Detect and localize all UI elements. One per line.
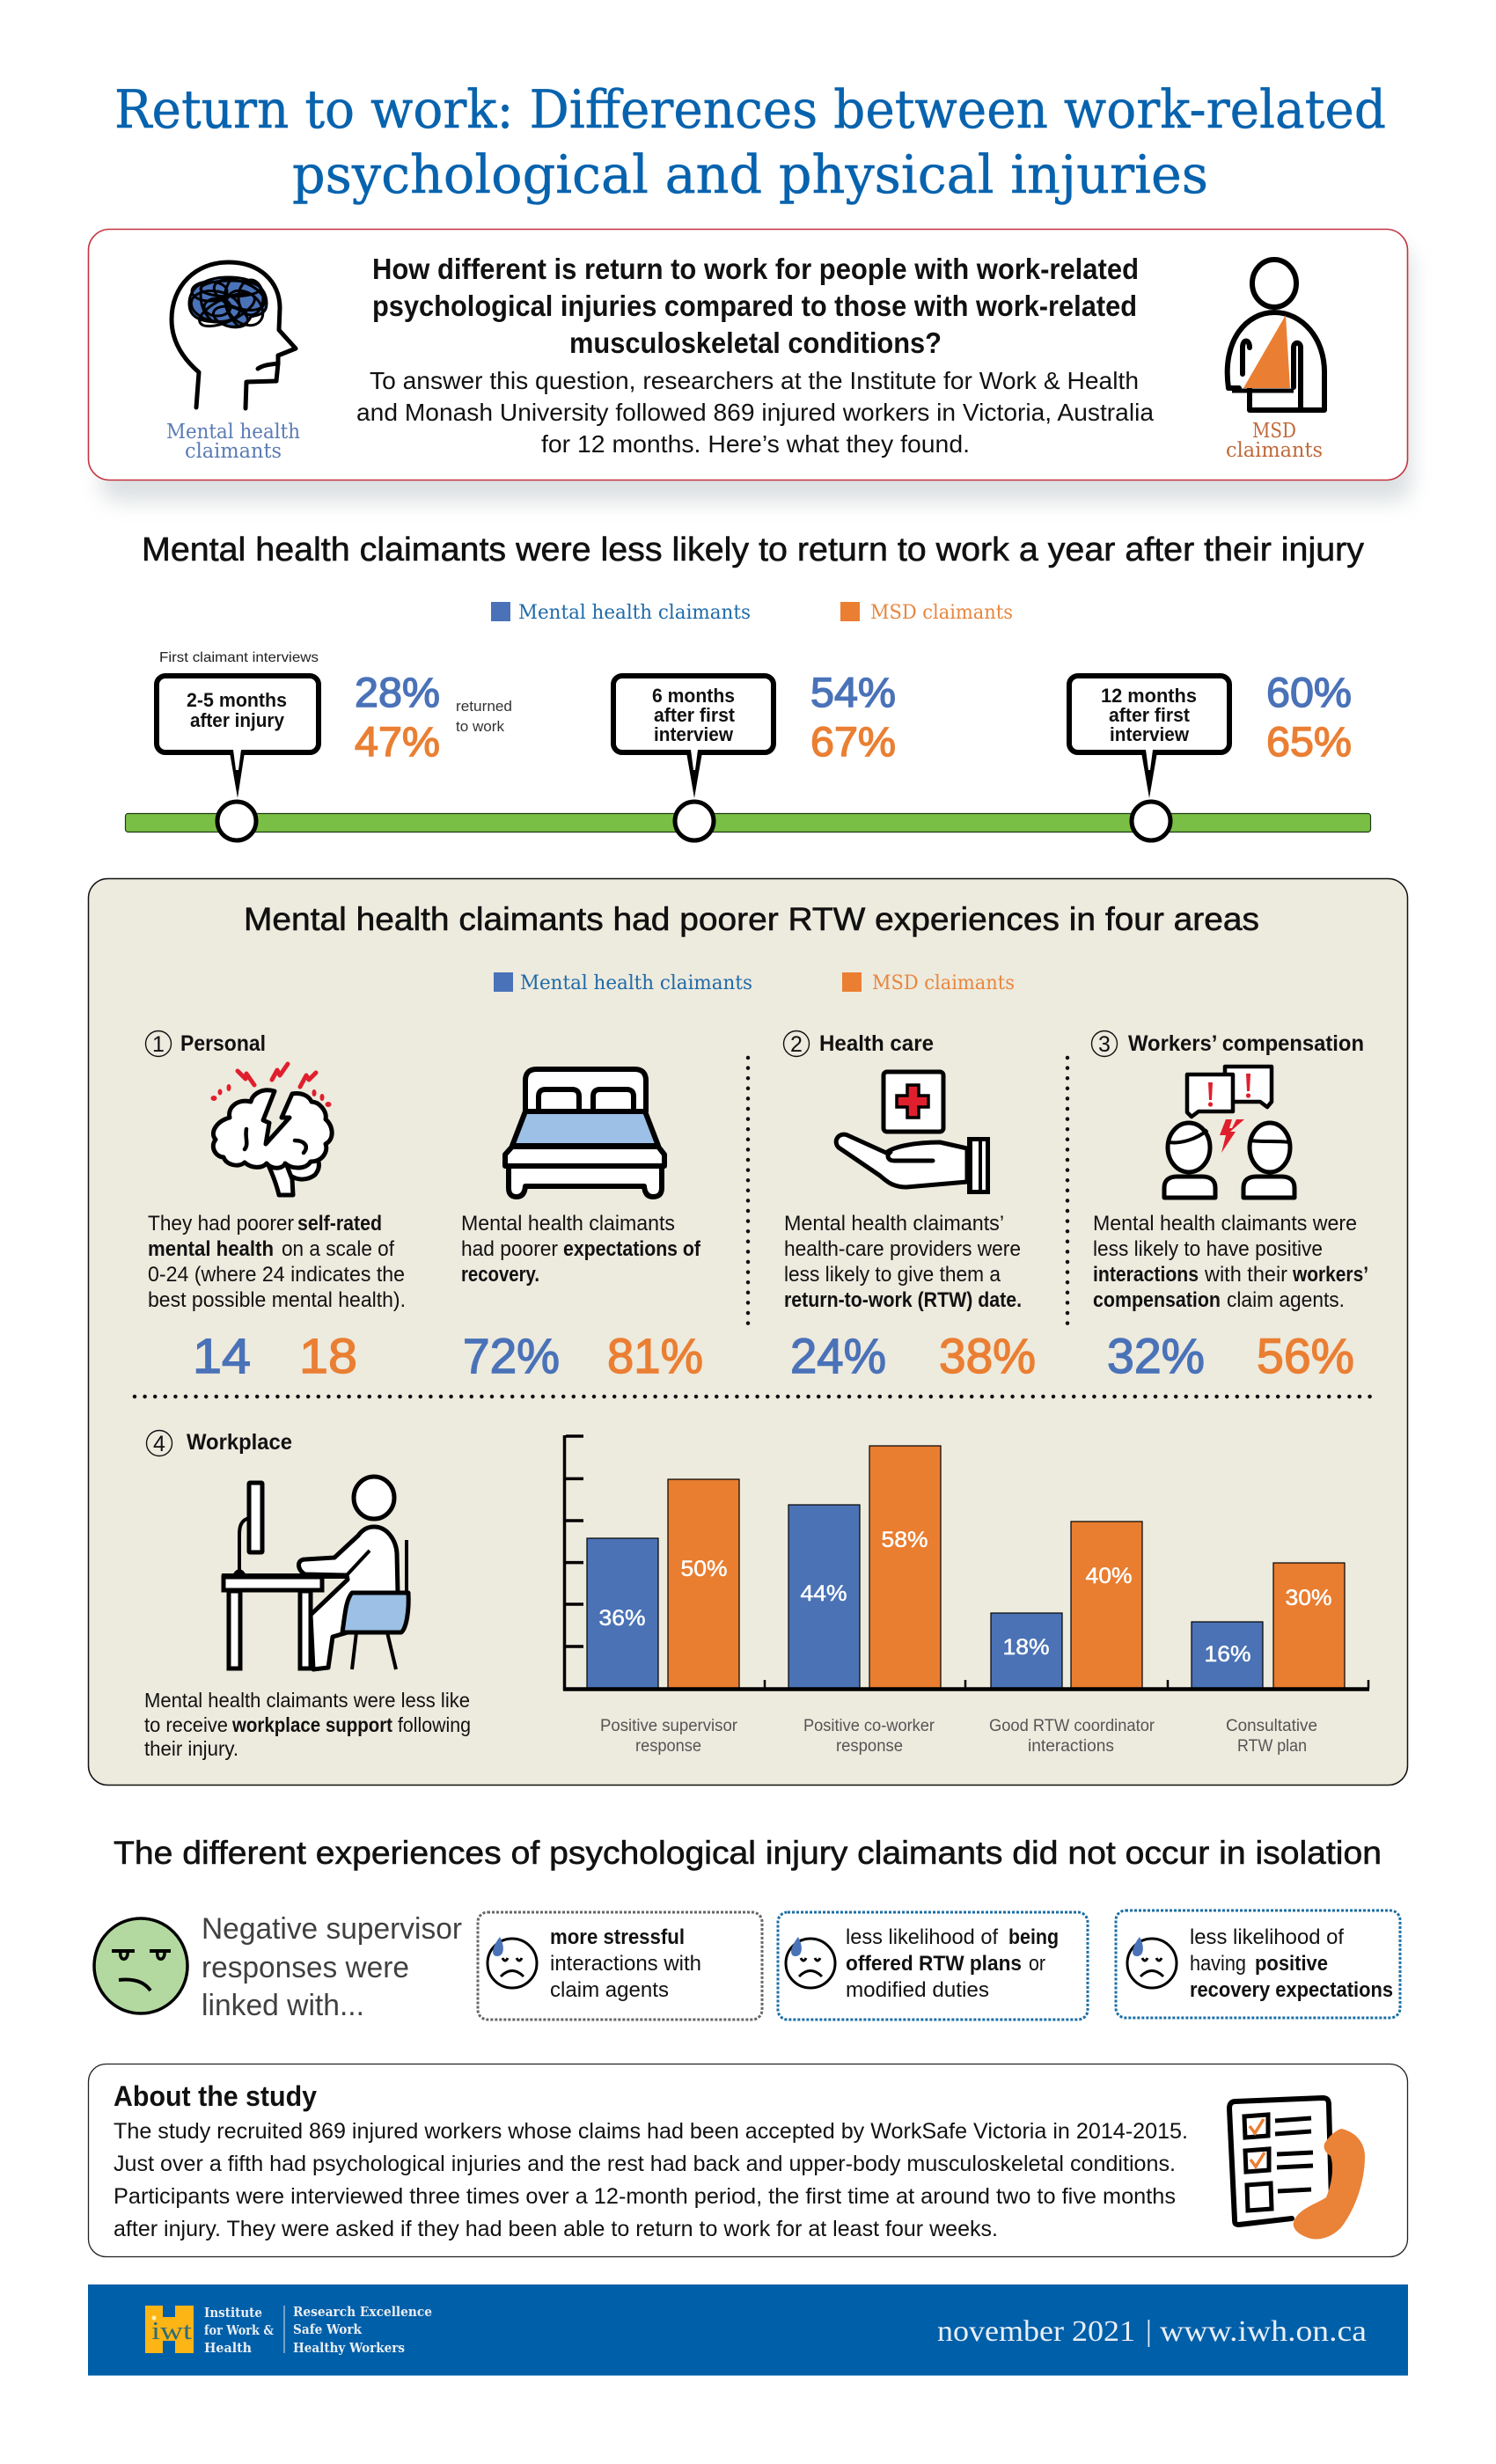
icon: cracked brain	[211, 1064, 332, 1195]
legend: four areas: Mental health claimants	[520, 972, 752, 994]
label: MSD claimants: claimants	[1226, 439, 1323, 462]
stage 3: 12 months: after first	[1109, 704, 1191, 726]
logo: IWH	[145, 2306, 194, 2353]
text: positive interactions: compensation	[1093, 1288, 1221, 1312]
stage 1: 2-5 months: 2-5 months	[187, 689, 287, 711]
legend: timeline: MSD claimants	[870, 602, 1013, 624]
study description: Participants were interviewed three times over a 12-month period, the first time at around two to five months	[114, 2184, 1176, 2209]
values: return-to-work date: 24%	[790, 1328, 886, 1383]
text: expectations of recovery: had poorer	[461, 1237, 558, 1261]
intro text: for 12 months. Here’s what they found.	[541, 430, 970, 458]
legend: timeline	[491, 602, 1013, 624]
values: return-to-work date: 38%	[939, 1328, 1036, 1383]
date and website: |	[1146, 2315, 1152, 2348]
text: return-to-work date: Mental health claimants’	[784, 1212, 1004, 1236]
text: expectations of recovery: expectations of	[563, 1237, 701, 1261]
label: mental health claimants: claimants	[185, 440, 282, 463]
timeline	[125, 650, 1371, 840]
heading: poorer RTW experiences: Mental health claimants had poorer RTW experiences in four areas	[244, 901, 1259, 937]
heading: did not occur in isolation: The different experiences of psychological injury claimants did not occur in isolation	[114, 1835, 1382, 1871]
chart category labels: interactions	[1028, 1737, 1114, 1756]
icon: bed	[505, 1069, 664, 1197]
section 4: workplace heading	[146, 1430, 292, 1456]
organization tagline: Safe Work	[293, 2321, 363, 2337]
text: negative supervisor responses: responses were	[202, 1951, 409, 1984]
chart category labels: response	[836, 1737, 903, 1756]
values: positive interactions: 32%	[1107, 1328, 1205, 1383]
stage 2: 6 months: 54%	[810, 669, 896, 715]
values: expectations of recovery: 72%	[463, 1328, 560, 1383]
text: positive interactions: interactions	[1093, 1263, 1199, 1287]
callout: stressful interactions	[478, 1912, 762, 2020]
study description: after injury. They were asked if they had been able to return to work for at least four weeks.	[114, 2217, 998, 2241]
values: positive interactions: 56%	[1257, 1328, 1354, 1383]
callout: stressful interactions: more stressful	[550, 1925, 685, 1949]
question text: How different is return to work for people with work-related	[372, 253, 1139, 285]
text: positive interactions: claim agents.	[1227, 1288, 1345, 1312]
intro text: To answer this question, researchers at the Institute for Work & Health	[370, 367, 1139, 394]
stage 2: 6 months: 6 months	[652, 685, 735, 707]
values: self-rated mental health: 14	[193, 1328, 251, 1383]
callout: RTW plans	[778, 1912, 1088, 2020]
text: workplace support: to receive	[144, 1713, 228, 1736]
text: self-rated mental health: best possible mental health).	[148, 1288, 406, 1312]
callout: RTW plans: less likelihood of	[846, 1925, 998, 1949]
footer	[88, 2284, 1408, 2376]
callout: recovery expectations: having	[1190, 1952, 1246, 1976]
title	[114, 79, 1386, 206]
organization name: Health	[204, 2340, 252, 2356]
panel: four areas	[88, 878, 1408, 1785]
text: workplace support: Mental health claimants were less like	[144, 1689, 470, 1712]
question text	[372, 253, 1139, 359]
chart category labels: response	[635, 1737, 701, 1756]
text: self-rated mental health: They had poorer	[148, 1212, 294, 1236]
text: workplace support: their injury.	[144, 1737, 238, 1760]
callout: recovery expectations	[1116, 1910, 1400, 2018]
text: expectations of recovery: recovery.	[461, 1263, 539, 1287]
bar value labels: 36%	[598, 1606, 646, 1631]
study description: Just over a fifth had psychological injuries and the rest had back and upper-body musculoskeletal conditions.	[114, 2152, 1176, 2176]
bar value labels: 18%	[1003, 1635, 1049, 1660]
icon: hand holding medical card	[836, 1072, 990, 1194]
stage 2: 6 months: after first	[654, 704, 736, 726]
text: negative supervisor responses	[202, 1912, 462, 2022]
text: negative supervisor responses: Negative supervisor	[202, 1912, 462, 1946]
legend: timeline: Mental health claimants	[518, 602, 751, 624]
stage 2: 6 months: interview	[654, 723, 734, 745]
text: positive interactions: with their	[1204, 1263, 1287, 1287]
callout: RTW plans: being	[1008, 1925, 1059, 1949]
stage 3: 12 months: 65%	[1266, 718, 1352, 765]
organization name: for Work &	[204, 2322, 274, 2338]
study description	[114, 2119, 1188, 2241]
text: return-to-work date: less likely to give them a	[784, 1263, 1001, 1287]
stage 1: 2-5 months: to work	[456, 718, 504, 735]
values: self-rated mental health: 18	[299, 1328, 357, 1383]
text: positive interactions: workers’	[1292, 1263, 1368, 1287]
text: return-to-work date	[784, 1212, 1022, 1312]
bars: positive supervisor response	[587, 1479, 739, 1689]
question text: psychological injuries compared to those with work-related	[372, 290, 1137, 322]
values: expectations of recovery: 81%	[607, 1328, 703, 1383]
chart category labels: RTW plan	[1237, 1737, 1307, 1756]
bars: good RTW coordinator interactions	[991, 1522, 1142, 1689]
text: positive interactions: less likely to have positive	[1093, 1237, 1323, 1261]
stage 1: 2-5 months: 28%	[355, 669, 440, 715]
callout: RTW plans: or	[1029, 1952, 1045, 1976]
icon: head with tangled brain	[172, 262, 296, 408]
section 3: workers' compensation heading: 3	[1098, 1032, 1111, 1057]
text: self-rated mental health: mental health	[148, 1237, 274, 1261]
stage 1: 2-5 months: returned	[456, 698, 512, 715]
bars: consultative RTW plan	[1192, 1563, 1345, 1689]
values: return-to-work date	[790, 1328, 1036, 1383]
icon: sad face with sweat drop	[786, 1937, 835, 1988]
icon: two people arguing	[1164, 1067, 1294, 1198]
section 4: workplace heading: Workplace	[187, 1430, 292, 1455]
text: return-to-work date: health-care providers were	[784, 1237, 1021, 1261]
stage 3: 12 months: 12 months	[1101, 685, 1197, 707]
text: expectations of recovery	[461, 1212, 701, 1287]
stage 3: 12 months: 60%	[1266, 669, 1352, 715]
stage 1: 2-5 months: 47%	[355, 718, 440, 765]
text: workplace support: following	[398, 1713, 471, 1736]
bars: positive co-worker response	[788, 1446, 941, 1689]
section 2: health care heading: 2	[790, 1032, 803, 1057]
chart category labels	[600, 1717, 1317, 1756]
callout: RTW plans: modified duties	[846, 1978, 989, 2002]
icon: person with arm sling	[1228, 260, 1324, 410]
title: psychological and physical injuries	[292, 144, 1208, 206]
callout: recovery expectations: recovery expectations	[1190, 1978, 1393, 2002]
bar chart: workplace support	[563, 1435, 1369, 1756]
section 1: personal heading: 1	[152, 1032, 165, 1057]
heading: about the study: About the study	[114, 2080, 317, 2112]
values: self-rated mental health	[193, 1328, 357, 1383]
callout: stressful interactions: interactions with	[550, 1952, 701, 1976]
label: mental health claimants: Mental health	[166, 421, 300, 444]
legend: four areas: MSD claimants	[872, 972, 1015, 994]
intro text: and Monash University followed 869 injured workers in Victoria, Australia	[356, 399, 1154, 426]
icon: person at desk	[222, 1477, 408, 1669]
values: expectations of recovery	[463, 1328, 703, 1383]
values: positive interactions	[1107, 1328, 1354, 1383]
title: Return to work: Differences between work-related	[114, 79, 1386, 141]
stage 3: 12 months	[1069, 669, 1352, 840]
logo: IWH: iwt	[151, 2318, 192, 2345]
study description: The study recruited 869 injured workers whose claims had been accepted by WorkSafe Victoria in 2014-2015.	[114, 2119, 1188, 2144]
timeline bar	[125, 813, 1371, 832]
bar value labels: 50%	[681, 1557, 727, 1581]
organization tagline: Research Excellence	[293, 2304, 432, 2320]
legend: four areas	[494, 972, 1015, 994]
label: mental health claimants	[166, 421, 300, 463]
icon: checklist and phone	[1229, 2098, 1365, 2239]
date and website	[937, 2315, 1367, 2348]
text: positive interactions	[1093, 1212, 1368, 1312]
text: self-rated mental health: self-rated	[297, 1212, 382, 1236]
icon: sad face with sweat drop	[1127, 1937, 1177, 1988]
first claimant interviews note: First claimant interviews	[159, 650, 319, 665]
text: workplace support	[144, 1689, 471, 1760]
stage 3: 12 months: interview	[1110, 723, 1190, 745]
bar value labels: 30%	[1285, 1586, 1332, 1610]
section 1: personal heading: Personal	[180, 1031, 266, 1056]
organization tagline	[293, 2304, 432, 2356]
chart category labels: Consultative	[1226, 1717, 1317, 1735]
label: MSD claimants: MSD	[1252, 420, 1296, 443]
chart category labels: Positive supervisor	[600, 1717, 738, 1735]
panel: research question	[88, 229, 1412, 502]
callout: stressful interactions: claim agents	[550, 1978, 669, 2002]
bar value labels: 58%	[882, 1528, 928, 1552]
text: self-rated mental health: 0-24 (where 24 indicates the	[148, 1263, 405, 1287]
section 4: workplace heading: 4	[153, 1432, 165, 1456]
date and website: november 2021	[937, 2315, 1135, 2348]
organization name	[204, 2305, 274, 2356]
callout: recovery expectations: less likelihood of	[1190, 1925, 1344, 1949]
organization name: Institute	[204, 2305, 262, 2321]
text: return-to-work date: return-to-work (RTW) date.	[784, 1288, 1022, 1312]
section 1: personal heading	[146, 1031, 266, 1057]
bar value labels: 40%	[1086, 1564, 1132, 1588]
chart category labels: Positive co-worker	[803, 1717, 935, 1735]
text: self-rated mental health: on a scale of	[282, 1237, 394, 1261]
text: workplace support: workplace support	[231, 1713, 392, 1736]
stage 2: 6 months	[613, 669, 896, 840]
intro text	[356, 367, 1154, 458]
heading: less likely to return: Mental health claimants were less likely to return to work a year after their injury	[142, 532, 1364, 568]
icon: annoyed green face	[94, 1918, 187, 2013]
callout: RTW plans: offered RTW plans	[846, 1952, 1022, 1976]
question text: musculoskeletal conditions?	[569, 326, 942, 359]
stage 1: 2-5 months: after injury	[190, 709, 285, 731]
callout: recovery expectations: positive	[1255, 1952, 1328, 1976]
bar value labels	[598, 1528, 1332, 1667]
text: self-rated mental health	[148, 1212, 406, 1312]
stage 1: 2-5 months	[157, 669, 512, 840]
section 2: health care heading: Health care	[819, 1031, 934, 1056]
section 3: workers' compensation heading: Workers’ compensation	[1128, 1031, 1364, 1056]
organization tagline: Healthy Workers	[293, 2340, 405, 2356]
panel: about the study	[88, 2064, 1408, 2256]
text: expectations of recovery: Mental health claimants	[461, 1212, 675, 1236]
bar value labels: 16%	[1204, 1642, 1251, 1667]
text: negative supervisor responses: linked with...	[202, 1989, 364, 2022]
chart category labels: Good RTW coordinator	[989, 1717, 1155, 1735]
icon: sad face with sweat drop	[488, 1937, 537, 1988]
text: positive interactions: Mental health claimants were	[1093, 1212, 1357, 1236]
date and website: www.iwh.on.ca	[1160, 2315, 1367, 2348]
stage 2: 6 months: 67%	[810, 718, 896, 765]
bar value labels: 44%	[801, 1581, 847, 1606]
label: MSD claimants	[1226, 420, 1323, 462]
